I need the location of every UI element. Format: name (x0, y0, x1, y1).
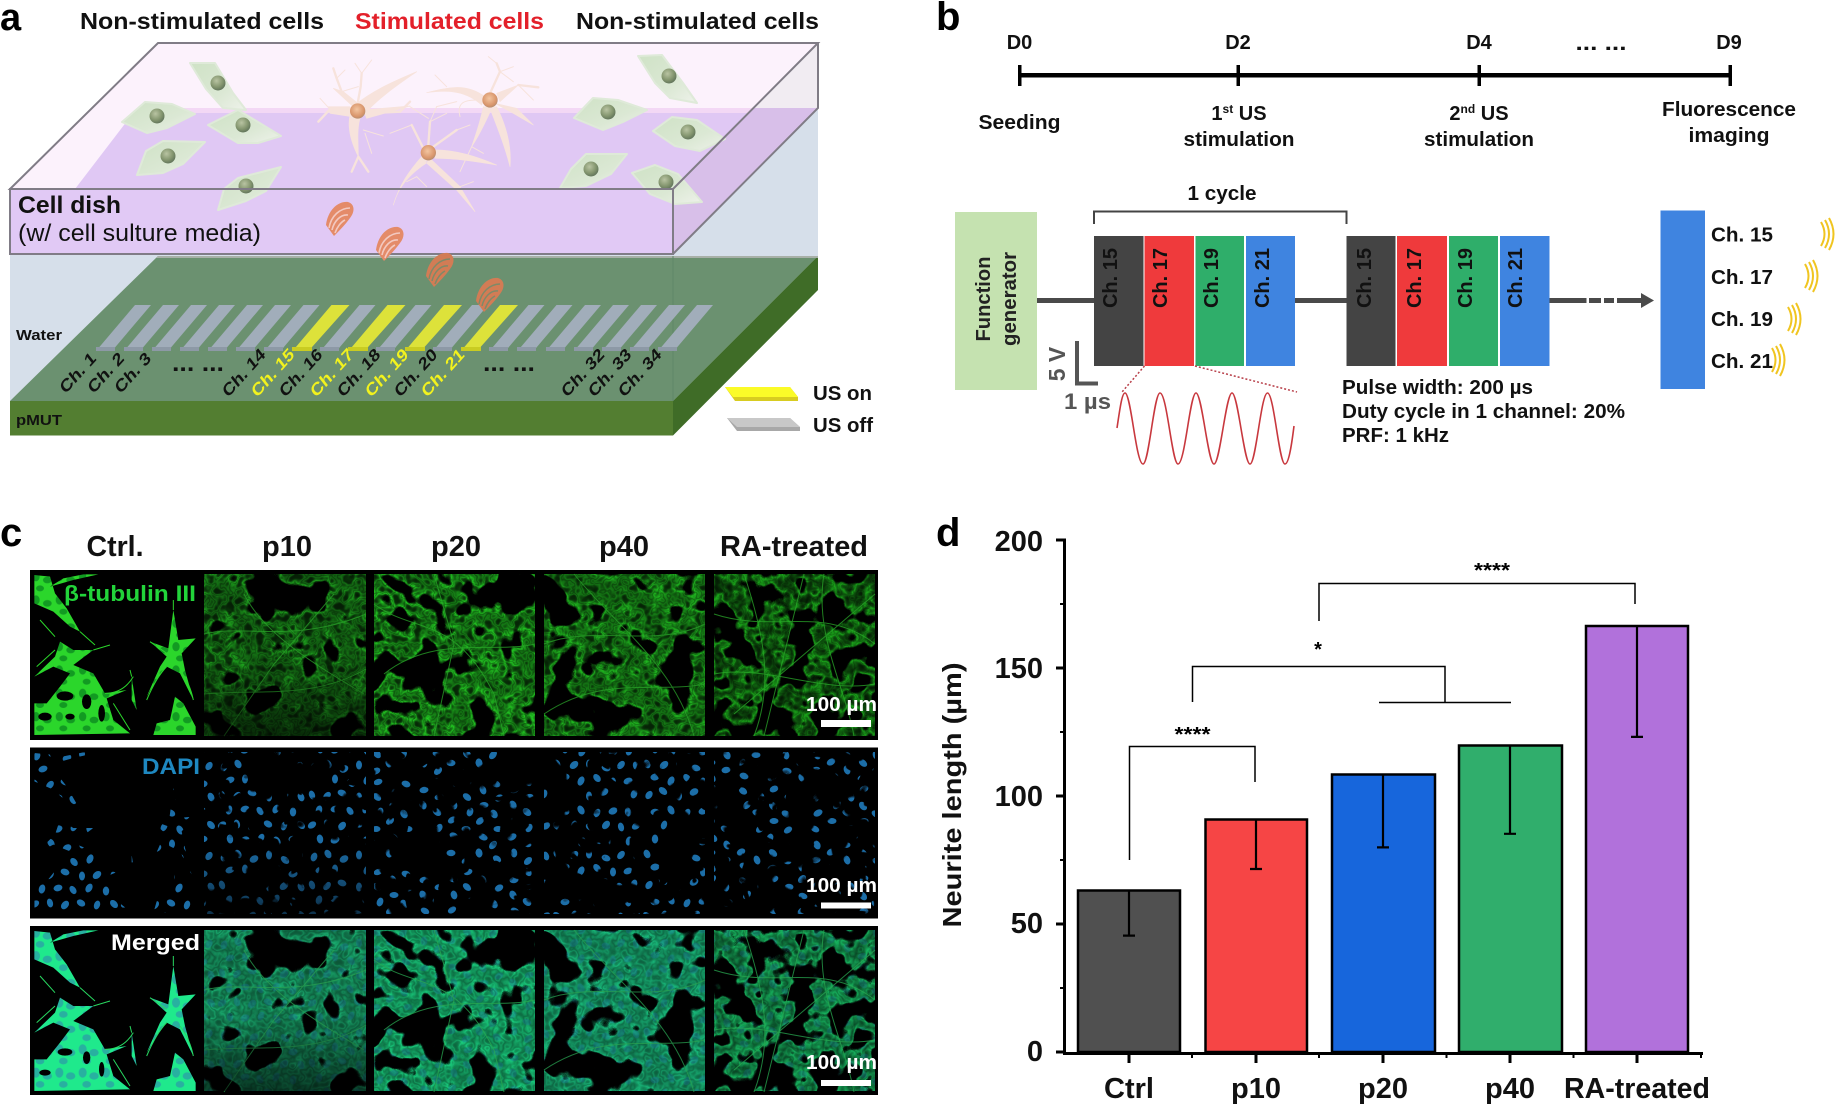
non-stimulated cells (122, 55, 725, 210)
label: merged: Merged (111, 930, 200, 955)
one cycle bracket (1094, 183, 1346, 224)
significance bracket: ctrl vs p10: **** (1174, 724, 1211, 746)
channel pulse train 1 (1094, 236, 1295, 366)
pMUT substrate (10, 256, 818, 436)
timeline: D0 (1007, 32, 1032, 54)
y axis tick labels: 50 (1011, 908, 1043, 940)
y axis tick labels: 150 (995, 653, 1043, 685)
x axis labels (1104, 1073, 1710, 1105)
timeline: US (1233, 103, 1267, 125)
output array bar (1660, 210, 1705, 389)
channel labels: ... ... (172, 350, 224, 377)
y axis tick labels: 200 (995, 526, 1043, 558)
heading: non-stimulated cells left: Non-stimulated cells (80, 8, 324, 34)
legend: US on: US on (813, 383, 872, 405)
timeline: 2 (1449, 103, 1461, 125)
panel a: pMUT and cell dish schematic (0, 0, 873, 437)
error bars (1123, 626, 1643, 936)
function generator: generator (999, 252, 1021, 346)
row: merged (30, 926, 878, 1095)
row: DAPI (30, 748, 878, 918)
timeline: stimulation (1184, 129, 1294, 151)
significance bracket: to RA-treated (1319, 560, 1635, 621)
channel pulse train 1: Ch. 15 (1100, 248, 1122, 308)
significance bracket: p10 vs p20-p40: * (1314, 639, 1322, 661)
channel labels (57, 345, 665, 401)
column headers: p10 (262, 531, 312, 563)
channel pulse train 1: Ch. 21 (1252, 248, 1274, 308)
cell dish top, liquid and side (10, 43, 818, 254)
channel pulse train 2: Ch. 17 (1404, 248, 1426, 308)
timeline: 1 (1211, 103, 1223, 125)
channel labels: Ch. 1 (57, 348, 99, 398)
channel labels: Ch. 20 (391, 345, 441, 401)
pulse parameters: Pulse width: 200 µs (1342, 377, 1533, 399)
channel labels: Ch. 32 (558, 345, 608, 401)
output channel labels: Ch. 19 (1711, 309, 1773, 331)
scale: 100 um: 100 µm (806, 694, 877, 716)
channel labels: Ch. 18 (334, 345, 384, 401)
text: cell dish: Cell dish (18, 192, 121, 219)
label: DAPI: DAPI (142, 754, 200, 779)
x axis labels: p20 (1358, 1073, 1408, 1105)
timeline: Seeding (978, 112, 1060, 134)
y axis tick labels: 0 (1027, 1036, 1043, 1068)
channel labels: ... ... (483, 350, 535, 377)
axes (1056, 538, 1703, 1063)
stimulated neurons (318, 57, 538, 212)
channel labels: Ch. 2 (85, 348, 127, 398)
ultrasound wave icon 3 (426, 253, 454, 287)
x axis labels: Ctrl (1104, 1073, 1154, 1105)
connecting lines and arrow (1037, 293, 1654, 308)
text: pMUT: pMUT (16, 412, 62, 429)
channel pulse train 2 (1346, 236, 1550, 366)
pulse parameters: PRF: 1 kHz (1342, 425, 1449, 447)
timeline: US (1475, 103, 1509, 125)
channel pulse train 2: Ch. 19 (1455, 248, 1477, 308)
y axis tick labels (995, 526, 1043, 1068)
timeline (978, 30, 1796, 151)
channel labels: Ch. 16 (276, 345, 326, 401)
significance bracket: ctrl vs p10 (1130, 724, 1255, 860)
legend: US on (725, 383, 872, 405)
pulse parameters: Duty cycle in 1 channel: 20% (1342, 401, 1625, 423)
legend: US off (727, 415, 873, 437)
panel letter d: d (936, 511, 960, 555)
timeline: nd (1461, 102, 1475, 116)
text: water: Water (16, 327, 62, 344)
x axis labels: RA-treated (1564, 1073, 1710, 1105)
zoom guide lines (1122, 366, 1297, 392)
water bath (10, 108, 818, 435)
scale: 100 um: 100 µm (806, 1052, 877, 1074)
column headers (86, 531, 868, 563)
timeline: ... ... (1576, 30, 1626, 55)
timeline: D9 (1716, 32, 1742, 54)
timeline: st (1223, 102, 1233, 116)
waveform (1117, 393, 1294, 464)
channel labels: Ch. 19 (362, 345, 412, 401)
timeline: imaging (1688, 125, 1770, 147)
text: culture media: (w/ cell sulture media) (18, 220, 261, 247)
channel labels: Ch. 17 (307, 345, 357, 401)
panel c: fluorescence micrographs (0, 511, 878, 1095)
timeline: Fluorescence (1662, 99, 1796, 121)
cell dish outlines (10, 43, 818, 254)
scale bar: 5 V (1044, 346, 1070, 381)
scale: 100 um (806, 875, 877, 908)
pulse parameters (1342, 377, 1625, 447)
scale: 100 um (806, 694, 877, 727)
row: beta-tubulin III (30, 570, 878, 740)
y axis title: Neurite length (µm) (937, 662, 967, 928)
column headers: p20 (431, 531, 481, 563)
scale: 100 um (806, 1052, 877, 1086)
channel labels: Ch. 15 (248, 345, 298, 401)
panel d: bar chart of neurite length (936, 511, 1710, 1105)
output channel labels: Ch. 21 (1711, 351, 1773, 373)
channel pulse train 2: Ch. 21 (1505, 248, 1527, 308)
significance bracket: to RA-treated: **** (1474, 560, 1510, 582)
icon: sound waves (1772, 218, 1834, 376)
channel labels: Ch. 14 (219, 345, 269, 401)
heading: non-stimulated cells right: Non-stimulated cells (576, 8, 819, 34)
neuron 2 (427, 57, 538, 172)
panel letter c: c (0, 511, 22, 555)
channel pulse train 1: Ch. 19 (1201, 248, 1223, 308)
x axis labels: p40 (1485, 1073, 1535, 1105)
one cycle bracket: 1 cycle (1188, 183, 1256, 205)
neuron 1 (318, 60, 428, 172)
transducer strips (96, 305, 713, 351)
panel b: stimulation protocol (936, 0, 1834, 464)
channel labels: Ch. 33 (585, 345, 635, 401)
significance bracket: p10 vs p20-p40 (1192, 639, 1511, 702)
column headers: Ctrl. (86, 531, 144, 563)
timeline: stimulation (1424, 129, 1534, 151)
scale bar: 1 µs (1064, 389, 1111, 414)
timeline: D4 (1466, 32, 1493, 54)
column headers: p40 (599, 531, 649, 563)
function generator (955, 212, 1037, 390)
scale: 100 um: 100 µm (806, 875, 877, 897)
label: beta-tubulin III: β-tubulin III (64, 581, 196, 606)
column headers: RA-treated (720, 531, 868, 563)
channel labels: Ch. 21 (418, 345, 468, 401)
timeline: D2 (1225, 32, 1251, 54)
channel labels: Ch. 3 (112, 348, 154, 398)
x axis labels: p10 (1231, 1073, 1281, 1105)
output channel labels: Ch. 15 (1711, 224, 1773, 246)
legend: US off: US off (813, 415, 873, 437)
channel pulse train 2: Ch. 15 (1354, 248, 1376, 308)
output channel labels (1711, 224, 1773, 373)
heading: stimulated cells: Stimulated cells (355, 8, 544, 34)
ultrasound wave icon 2 (376, 227, 404, 261)
ultrasound wave icon 4 (476, 278, 504, 312)
channel labels: Ch. 34 (615, 345, 665, 401)
neuron 3 (390, 107, 497, 212)
scale bar (1044, 341, 1111, 414)
ultrasound wave icon 1 (326, 202, 354, 236)
y axis tick labels: 100 (995, 781, 1043, 813)
function generator: Function (973, 256, 995, 342)
output channel labels: Ch. 17 (1711, 267, 1773, 289)
bars (1078, 626, 1688, 1052)
channel pulse train 1: Ch. 17 (1150, 248, 1172, 308)
